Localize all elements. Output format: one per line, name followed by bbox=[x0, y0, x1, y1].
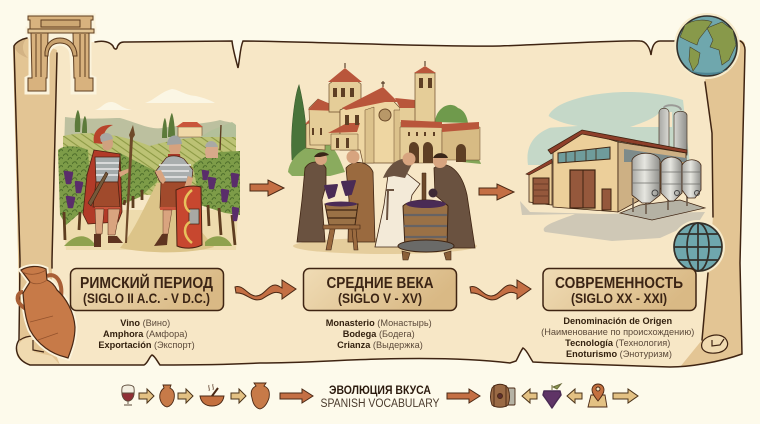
wavy arrow: box one to two bbox=[235, 280, 296, 300]
arrow bbox=[139, 389, 154, 403]
soldier left bbox=[83, 150, 122, 224]
soldier right bbox=[169, 139, 181, 156]
strip title: ЭВОЛЮЦИЯ ВКУСА bbox=[329, 385, 431, 397]
arrow right bbox=[613, 389, 638, 403]
vocabulary: medieval: Monasterio (Монастырь) bbox=[326, 318, 432, 328]
title box: middle ages: СРЕДНИЕ ВЕКА bbox=[326, 275, 434, 292]
long arrow bbox=[280, 389, 313, 403]
panel: winery illustration bbox=[520, 92, 705, 241]
panel: monastery illustration bbox=[288, 61, 481, 260]
arrow: medieval to modern bbox=[479, 184, 514, 200]
small vat bbox=[325, 204, 358, 225]
title box: middle ages bbox=[304, 268, 456, 310]
monk right bbox=[434, 165, 475, 248]
grape bunches bbox=[325, 181, 355, 198]
building bbox=[553, 131, 618, 212]
vocabulary: modern: Denominación de Origen bbox=[563, 316, 672, 326]
panel: roman illustration bbox=[58, 89, 240, 252]
vocabulary: roman: Amphora (Амфора) bbox=[103, 329, 187, 339]
long arrow bbox=[447, 389, 480, 403]
icon: wine glass bbox=[122, 385, 134, 405]
monk one bbox=[297, 162, 326, 242]
bushes bbox=[288, 143, 345, 176]
ground shadow bbox=[520, 201, 705, 241]
icon: bowl bbox=[200, 384, 224, 406]
spear bbox=[125, 125, 135, 243]
monk white robe bbox=[375, 172, 420, 247]
wine press bbox=[422, 173, 426, 203]
background soldier bbox=[205, 144, 218, 158]
church bbox=[306, 115, 325, 150]
vocabulary: modern: Enoturismo (Энотуризм) bbox=[566, 349, 672, 359]
strip title bbox=[320, 385, 440, 410]
vocabulary: roman: Vino (Вино) bbox=[120, 318, 170, 328]
icon: amphora bbox=[18, 266, 75, 358]
title box: roman period: (SIGLO II A.C. - V D.C.) bbox=[83, 291, 210, 306]
steel tanks bbox=[620, 200, 705, 220]
vines bbox=[58, 146, 92, 225]
vocabulary: roman: Exportación (Экспорт) bbox=[98, 340, 195, 350]
wavy arrow: box two to three bbox=[470, 280, 531, 300]
monk two bbox=[346, 162, 375, 242]
arrow bbox=[178, 389, 193, 403]
icon: grapes bbox=[543, 384, 561, 408]
icon: triumphal arch bbox=[26, 15, 95, 93]
arrow left bbox=[522, 389, 537, 403]
title box: roman period: РИМСКИЙ ПЕРИОД bbox=[80, 274, 213, 292]
title box: modern era: (SIGLO XX - XXI) bbox=[571, 291, 667, 306]
ground bbox=[293, 238, 477, 254]
hills and fields bbox=[64, 117, 236, 150]
title box: middle ages: (SIGLO V - XV) bbox=[338, 291, 422, 306]
vocabulary: medieval: Crianza (Выдержка) bbox=[337, 340, 423, 350]
icon: barrel bbox=[490, 384, 515, 407]
icon: amphora bbox=[251, 383, 269, 409]
distillation columns bbox=[659, 108, 687, 155]
vocabulary: modern: Tecnología (Технология) bbox=[565, 338, 670, 348]
arrow: roman to medieval bbox=[250, 180, 284, 196]
arrow left bbox=[567, 389, 582, 403]
clouds bbox=[95, 89, 215, 110]
shield bbox=[176, 186, 202, 248]
icon: earth globe bbox=[674, 13, 740, 79]
parchment scroll bbox=[13, 38, 745, 367]
path bbox=[120, 183, 214, 252]
icon: small amphora bbox=[160, 385, 174, 407]
cypress bbox=[292, 85, 307, 160]
strip title: SPANISH VOCABULARY bbox=[320, 398, 440, 410]
icon: map pin bbox=[588, 384, 607, 407]
arrow bbox=[231, 389, 246, 403]
title box: modern era bbox=[543, 268, 696, 310]
icon: wire globe bbox=[671, 220, 725, 274]
vocabulary: medieval: Bodega (Бодега) bbox=[343, 329, 415, 339]
ground bbox=[62, 210, 238, 250]
title box: roman period bbox=[70, 268, 224, 310]
sky bbox=[527, 92, 690, 165]
vocabulary: modern: (Наименование по происхождению) bbox=[541, 327, 694, 337]
title box: modern era: СОВРЕМЕННОСТЬ bbox=[555, 275, 683, 292]
villa bbox=[178, 127, 202, 137]
bottom strip: taste evolution bbox=[122, 383, 638, 410]
